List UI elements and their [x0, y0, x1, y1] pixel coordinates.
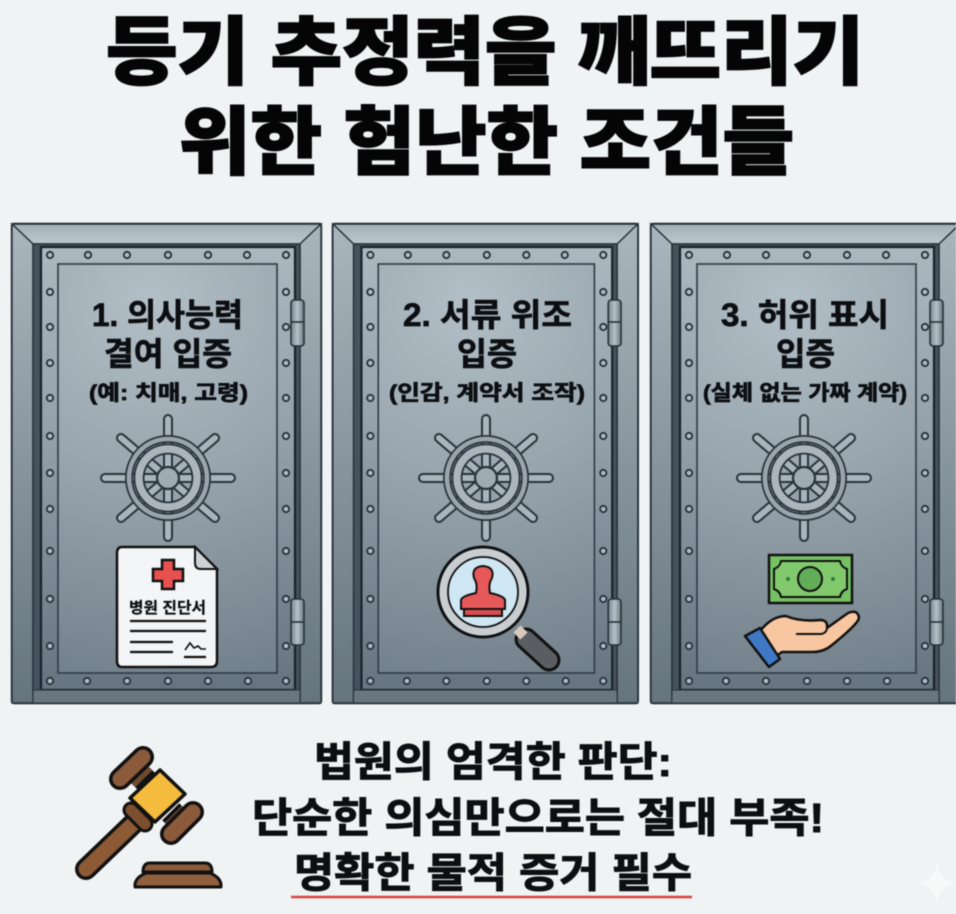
- panel: vault door 3, false declaration: [651, 224, 956, 703]
- door 3 heading: 3. 허위 표시: [721, 297, 889, 333]
- icon: magnifier over stamp: [438, 547, 549, 660]
- text block: court's strict judgment: 법원의 엄격한 판단:: [314, 739, 672, 785]
- icon: sparkle watermark: [917, 862, 956, 905]
- text block: court's strict judgment: 명확한 물적 증거 필수: [294, 850, 692, 896]
- door 1 heading: 결여 입증: [104, 336, 232, 372]
- vault door 3 body: [651, 224, 956, 703]
- panel: vault door 2, forgery: [333, 224, 638, 703]
- text block: court's strict judgment: 단순한 의심만으로는 절대 부족!: [252, 795, 824, 841]
- icon: banknote over open hand: [745, 555, 859, 667]
- vault door 1 body: [12, 224, 321, 703]
- icon: hospital diagnosis document: [117, 547, 217, 667]
- panel: vault door 1, lack of capacity: [12, 224, 321, 703]
- door 3 heading: [703, 297, 907, 405]
- icon: judge gavel: [86, 757, 221, 887]
- door 3 heading: (실체 없는 가짜 계약): [703, 382, 907, 405]
- title: [106, 0, 864, 190]
- door 3 heading: 입증: [776, 336, 835, 372]
- door 2 heading: 입증: [457, 336, 517, 372]
- door 1 wheel: [105, 419, 231, 537]
- door 2 heading: 2. 서류 위조: [403, 297, 572, 333]
- door 1 heading: (예: 치매, 고령): [89, 382, 248, 405]
- icon: hospital diagnosis document: 병원 진단서: [129, 599, 206, 617]
- vault door 2 body: [333, 224, 638, 703]
- title: 위한 험난한 조건들: [179, 83, 794, 190]
- door 3 wheel: [741, 419, 867, 537]
- door 2 heading: (인감, 계약서 조작): [389, 382, 585, 405]
- text block: court's strict judgment: [252, 739, 824, 897]
- door 1 heading: [89, 297, 248, 405]
- door 2 wheel: [423, 419, 549, 537]
- door 1 heading: 1. 의사능력: [92, 297, 243, 333]
- door 2 heading: [389, 297, 585, 405]
- red underline: [291, 896, 692, 898]
